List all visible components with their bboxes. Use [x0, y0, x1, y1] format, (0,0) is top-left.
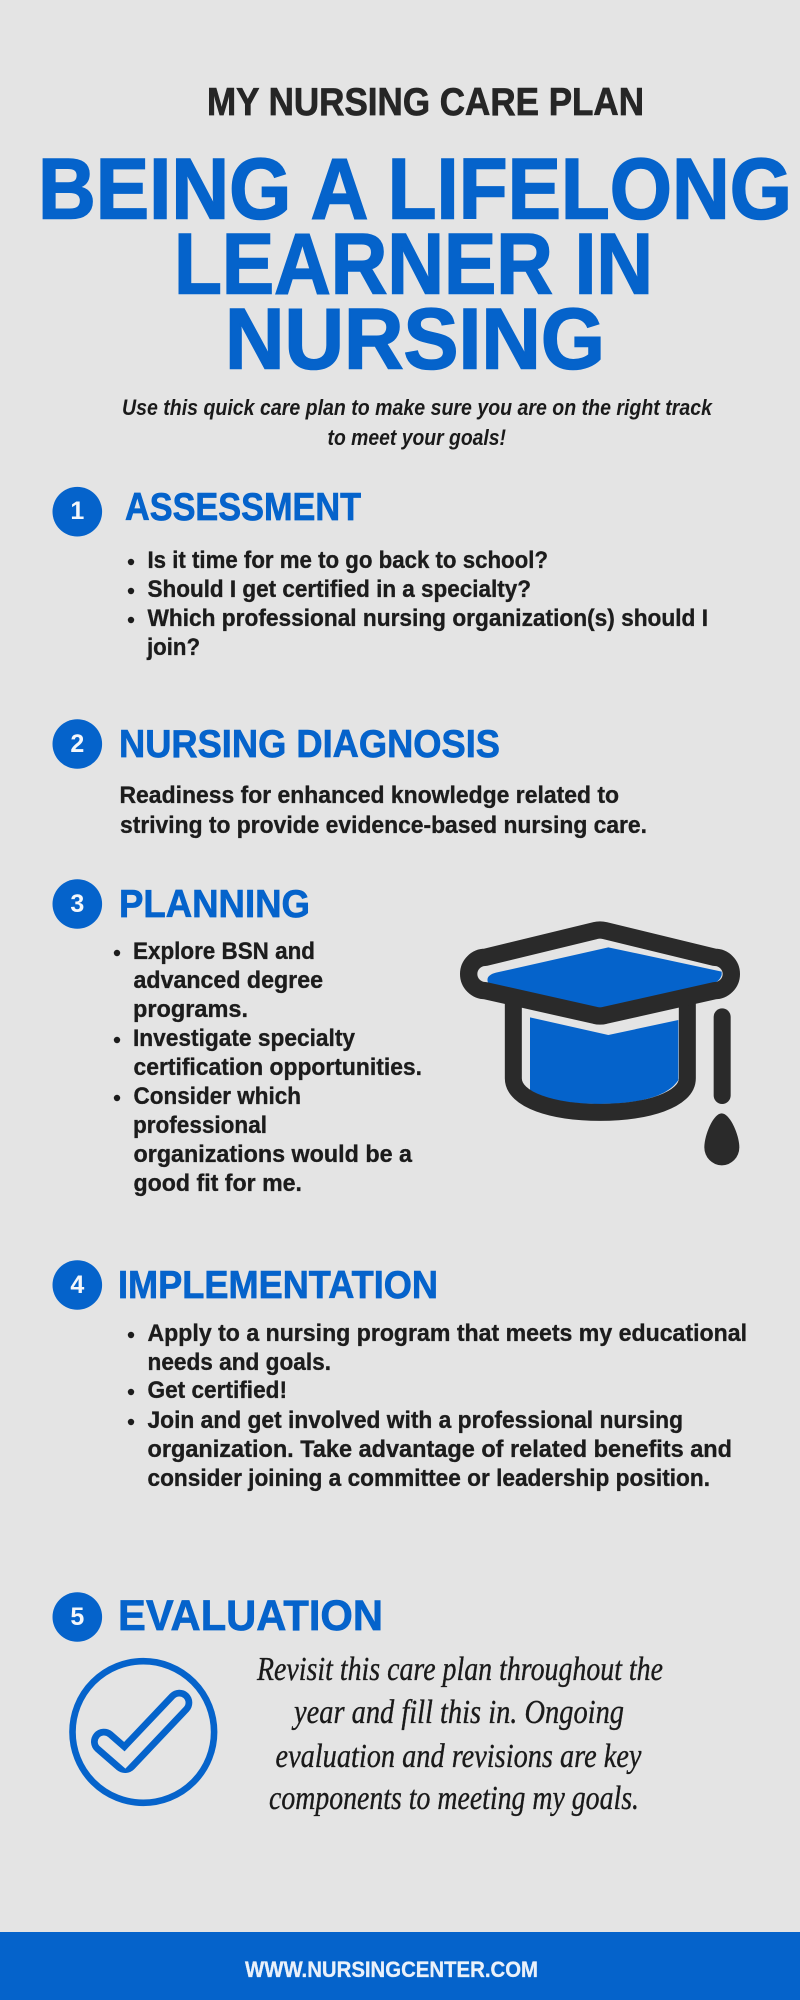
planning bullet list: professional [133, 1112, 267, 1139]
assessment bullet list: join? [146, 634, 200, 661]
assessment bullet list [128, 547, 708, 661]
heading: nursing diagnosis: NURSING DIAGNOSIS [119, 723, 500, 766]
heading: implementation: IMPLEMENTATION [118, 1264, 438, 1307]
planning bullet list: organizations would be a [134, 1141, 412, 1168]
planning bullet list: Explore BSN and [133, 938, 315, 965]
implementation bullet list [128, 1320, 747, 1492]
intro text [122, 395, 714, 450]
heading: planning: PLANNING [119, 883, 310, 926]
diagnosis text: striving to provide evidence-based nursing care. [120, 812, 647, 839]
diagnosis text [120, 782, 647, 839]
number badge 3 [53, 879, 102, 929]
panel: planning [53, 879, 739, 1197]
number badge 5 [53, 1592, 102, 1642]
number badge 2: 2 [70, 730, 84, 758]
panel: evaluation [53, 1592, 663, 1817]
panel: assessment [53, 486, 708, 661]
assessment bullet list: Should I get certified in a specialty? [148, 576, 531, 603]
evaluation script text: Revisit this care plan throughout the [256, 1651, 663, 1688]
footer band [0, 1932, 800, 2000]
number badge 5: 5 [70, 1603, 84, 1631]
assessment bullet list: Is it time for me to go back to school? [148, 547, 548, 574]
planning bullet list: Investigate specialty [133, 1025, 355, 1052]
planning bullet list: certification opportunities. [134, 1054, 422, 1081]
number badge 4: 4 [70, 1271, 84, 1299]
implementation bullet list: Apply to a nursing program that meets my educational [148, 1320, 747, 1347]
implementation bullet list: Get certified! [148, 1377, 287, 1404]
evaluation script text [256, 1651, 663, 1817]
panel: implementation [53, 1260, 747, 1492]
implementation bullet list: Join and get involved with a professional nursing [148, 1407, 683, 1434]
heading: assessment: ASSESSMENT [125, 486, 361, 529]
evaluation script text: components to meeting my goals. [269, 1780, 639, 1817]
title: NURSING [225, 292, 605, 388]
number badge 1 [53, 487, 102, 536]
implementation bullet list: organization. Take advantage of related benefits and [148, 1436, 732, 1463]
planning bullet list [114, 938, 422, 1197]
evaluation script text: evaluation and revisions are key [276, 1738, 642, 1775]
planning bullet list: programs. [133, 996, 248, 1023]
title [38, 142, 792, 388]
evaluation script text: year and fill this in. Ongoing [291, 1694, 624, 1731]
diagnosis text: Readiness for enhanced knowledge related to [120, 782, 619, 809]
intro text: Use this quick care plan to make sure you are on the right track [122, 395, 714, 420]
implementation bullet list: consider joining a committee or leadership position. [148, 1465, 710, 1492]
intro text: to meet your goals! [328, 425, 506, 450]
icon: check mark in circle [72, 1661, 214, 1803]
number badge 3: 3 [70, 890, 84, 918]
title: LEARNER IN [174, 216, 653, 312]
planning bullet list: good fit for me. [134, 1170, 302, 1197]
number badge 2 [53, 719, 102, 769]
assessment bullet list: Which professional nursing organization(s) should I [148, 605, 708, 632]
number badge 1: 1 [70, 497, 84, 525]
implementation bullet list: needs and goals. [148, 1349, 331, 1376]
panel: nursing diagnosis [53, 719, 647, 839]
planning bullet list: advanced degree [134, 967, 323, 994]
eyebrow heading: MY NURSING CARE PLAN [207, 81, 644, 124]
planning bullet list: Consider which [134, 1083, 301, 1110]
icon: graduation cap [469, 930, 739, 1165]
heading: evaluation: EVALUATION [118, 1592, 383, 1640]
number badge 4 [53, 1260, 102, 1310]
footer url: WWW.NURSINGCENTER.COM [245, 1957, 538, 1982]
